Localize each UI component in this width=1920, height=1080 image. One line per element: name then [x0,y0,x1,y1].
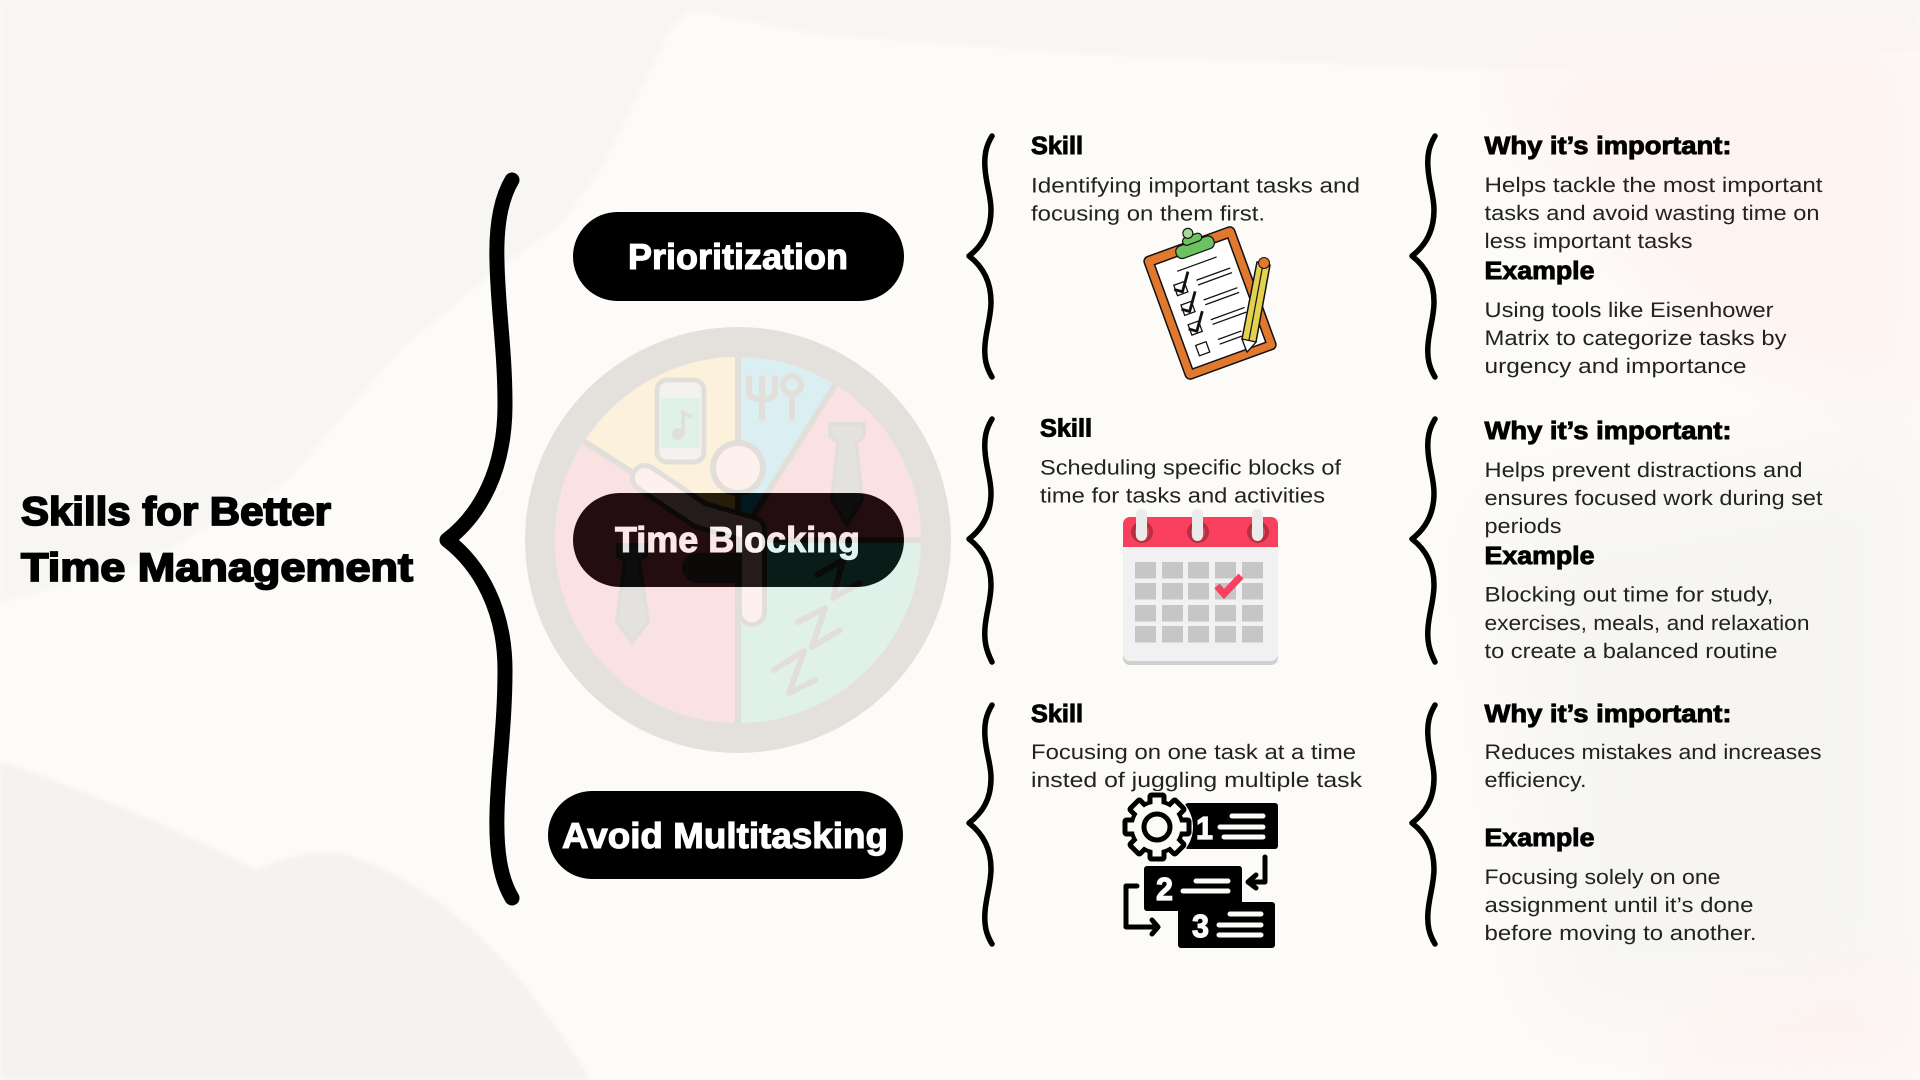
text: row 3 skill: Focusing on one task at a time [1031,741,1356,764]
pill: Time Blocking [573,493,904,587]
text: row 3 skill: insted of juggling multiple task [1031,769,1363,792]
text: row 2 skill: time for tasks and activities [1040,484,1325,508]
icon: ordered task list with gear: 2 [1156,871,1173,907]
row 3 why brace [1412,705,1435,944]
text: row 1 why and example: tasks and avoid wasting time on [1484,202,1820,225]
row 3 skill brace [969,705,992,944]
pill: Avoid Multitasking [548,791,903,879]
text: row 3 why and example [1484,700,1822,945]
text: row 3 why and example: Reduces mistakes and increases [1484,741,1822,764]
text: row 1 why and example: urgency and importance [1484,355,1746,378]
title: Time Management [21,546,413,590]
icon: ordered task list with gear: 1 [1196,810,1213,846]
text: row 3 skill [1031,700,1363,792]
main brace [447,180,512,898]
pill: Prioritization: Prioritization [628,236,848,277]
icon: faded clock with daily activities [540,342,936,738]
title: Skills for Better [21,490,331,534]
pill: Prioritization [573,212,904,301]
text: row 2 why and example: Helps prevent distractions and [1484,459,1802,482]
text: row 3 why and example: Focusing solely on one [1484,866,1720,889]
text: row 1 why and example: Helps tackle the most important [1484,174,1823,197]
row 2 skill brace [969,419,992,662]
text: row 2 skill: Scheduling specific blocks of [1040,456,1341,480]
row 1 why brace [1412,136,1435,377]
icon: ordered task list with gear [1121,791,1278,948]
row 1 skill brace [969,136,992,377]
text: row 1 skill [1031,132,1360,226]
text: row 2 why and example: Blocking out time for study, [1484,584,1774,606]
text: row 1 why and example [1484,132,1823,378]
row 2 why brace [1412,419,1435,662]
text: row 1 why and example: Using tools like Eisenhower [1484,299,1774,322]
text: row 1 skill: focusing on them first. [1031,202,1265,226]
text: row 3 why and example: efficiency. [1484,769,1586,792]
text: row 3 why and example: assignment until it’s done [1484,894,1754,917]
text: row 1 why and example: Example [1484,257,1595,285]
pill: Time Blocking: Time Blocking [615,519,860,560]
text: row 3 skill: Skill [1031,700,1083,728]
text: row 1 why and example: Why it’s important: [1484,132,1732,160]
text: row 2 why and example: ensures focused work during set [1484,487,1823,510]
text: row 2 why and example: exercises, meals, and relaxation [1484,612,1810,635]
text: row 2 why and example: Example [1484,542,1595,570]
text: row 2 why and example: to create a balanced routine [1484,640,1778,663]
text: row 3 why and example: before moving to another. [1484,922,1756,945]
text: row 3 why and example: Why it’s important: [1484,700,1732,728]
text: row 2 why and example: periods [1484,515,1562,538]
icon: clipboard checklist [1138,213,1277,380]
text: row 2 skill [1040,414,1341,508]
text: row 2 skill: Skill [1040,414,1092,442]
text: row 1 why and example: Matrix to categorize tasks by [1484,327,1787,350]
text: row 1 why and example: less important tasks [1484,230,1692,253]
text: row 3 why and example: Example [1484,824,1595,852]
text: row 1 skill: Skill [1031,132,1083,160]
text: row 2 why and example [1484,417,1823,663]
text: row 2 why and example: Why it’s important: [1484,417,1732,445]
pill: Avoid Multitasking: Avoid Multitasking [562,815,888,856]
text: row 1 skill: Identifying important tasks and [1031,174,1360,198]
title [21,490,413,590]
icon: calendar [1123,509,1278,665]
icon: ordered task list with gear: 3 [1192,908,1209,944]
